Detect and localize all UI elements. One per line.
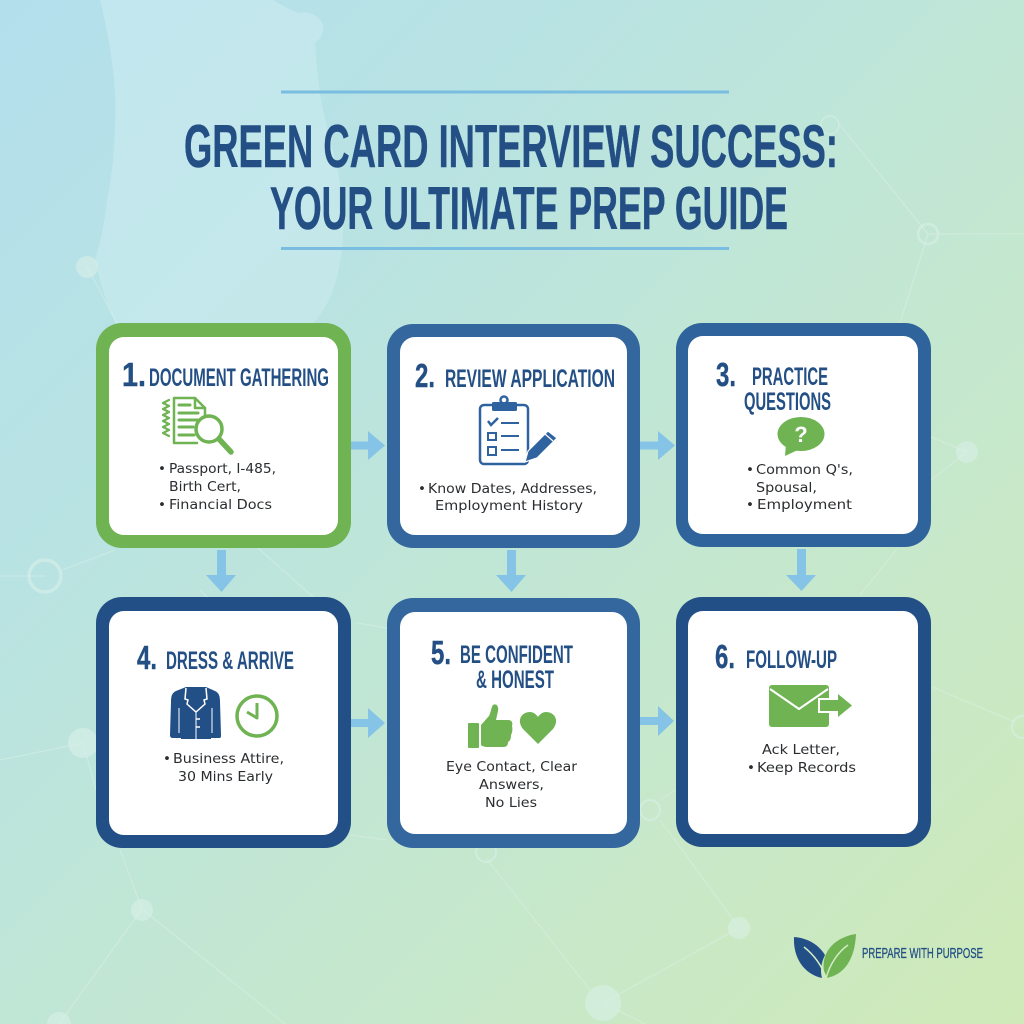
step 6 text: Keep Records <box>757 760 856 776</box>
step 6 heading: 6. <box>715 638 735 675</box>
arrow: step 1 to 4 <box>206 550 236 592</box>
step 2 heading: REVIEW APPLICATION <box>445 365 615 393</box>
panel: step 5 be confident and honest <box>387 598 640 848</box>
step 6 heading <box>715 638 837 675</box>
step 1 text: Passport, I-485, <box>169 461 276 477</box>
step 6 text: • <box>747 760 755 776</box>
step 4 heading: 4. <box>137 639 157 676</box>
step 4 text: • <box>163 751 171 767</box>
step 4 text: 30 Mins Early <box>178 769 273 785</box>
step 6 text: Ack Letter, <box>762 742 840 758</box>
step 5 heading: & HONEST <box>476 666 554 694</box>
icon: speech bubble with question mark: ? <box>794 422 808 447</box>
title <box>184 113 838 242</box>
icon: speech bubble with question mark <box>778 417 824 456</box>
arrow: step 3 to 6 <box>786 549 816 591</box>
icon: leaves <box>794 934 856 978</box>
logo: prepare with purpose <box>794 934 983 978</box>
bottom rule <box>281 247 729 250</box>
step 4 heading <box>137 639 294 676</box>
icon: envelope with arrow <box>769 685 852 727</box>
panel: step 3 practice questions <box>676 323 931 547</box>
step 5 heading: 5. <box>431 634 451 671</box>
arrow: step 2 to 5 <box>496 550 526 592</box>
step 1 heading: DOCUMENT GATHERING <box>149 364 329 392</box>
arrow: step 4 to 5 <box>351 708 385 738</box>
step 3 text: • <box>746 462 754 478</box>
step 5 text: No Lies <box>485 795 537 811</box>
step 2 text: Employment History <box>435 498 583 514</box>
step 3 text: • <box>746 497 754 513</box>
step 3 text: Employment <box>757 497 852 513</box>
step 6 heading: FOLLOW-UP <box>746 646 837 674</box>
step 1 text <box>158 461 276 513</box>
step 1 text: • <box>158 497 166 513</box>
step 5 text: Answers, <box>479 777 544 793</box>
step 3 heading: PRACTICE <box>752 363 828 391</box>
arrow: step 1 to 2 <box>351 431 385 460</box>
step 3 heading: 3. <box>716 356 736 393</box>
step 5 heading: BE CONFIDENT <box>460 641 573 669</box>
icon: heart <box>520 712 556 744</box>
panel: step 6 follow-up <box>676 597 931 847</box>
step 1 heading <box>122 356 329 393</box>
step 1 heading: 1. <box>122 356 146 393</box>
step 5 text: Eye Contact, Clear <box>446 759 577 775</box>
icon: thumbs up <box>468 704 512 748</box>
step 2 heading: 2. <box>415 357 435 394</box>
step 6 text <box>747 742 856 776</box>
step 1 text: Financial Docs <box>169 497 272 513</box>
step 2 text: Know Dates, Addresses, <box>428 481 597 497</box>
panel: step 1 document gathering <box>96 323 351 548</box>
step 4 text: Business Attire, <box>173 751 284 767</box>
step 5 text <box>446 759 577 811</box>
step 2 text: • <box>418 481 426 497</box>
step 3 text: Common Q's, <box>756 462 853 478</box>
icon: document with magnifier <box>163 398 231 452</box>
step 3 text: Spousal, <box>756 480 817 496</box>
step 4 text <box>163 751 284 785</box>
step 3 heading: QUESTIONS <box>744 388 831 416</box>
step 1 text: Birth Cert, <box>169 479 241 495</box>
panel: step 4 dress and arrive <box>96 597 351 848</box>
panel: step 2 review application <box>387 324 640 548</box>
arrow: step 2 to 3 <box>640 431 675 460</box>
top rule <box>281 90 729 94</box>
step 3 text <box>746 462 853 513</box>
icon: suit jacket <box>170 687 221 739</box>
step 4 heading: DRESS & ARRIVE <box>166 647 294 675</box>
step 2 text <box>418 481 597 514</box>
step 1 text: • <box>158 461 166 477</box>
icon: clock <box>237 696 277 736</box>
step 3 heading <box>716 356 831 416</box>
step 2 heading <box>415 357 615 394</box>
icon: clipboard and pen <box>480 396 557 464</box>
step 5 heading <box>431 634 573 694</box>
arrow: step 5 to 6 <box>640 706 674 736</box>
